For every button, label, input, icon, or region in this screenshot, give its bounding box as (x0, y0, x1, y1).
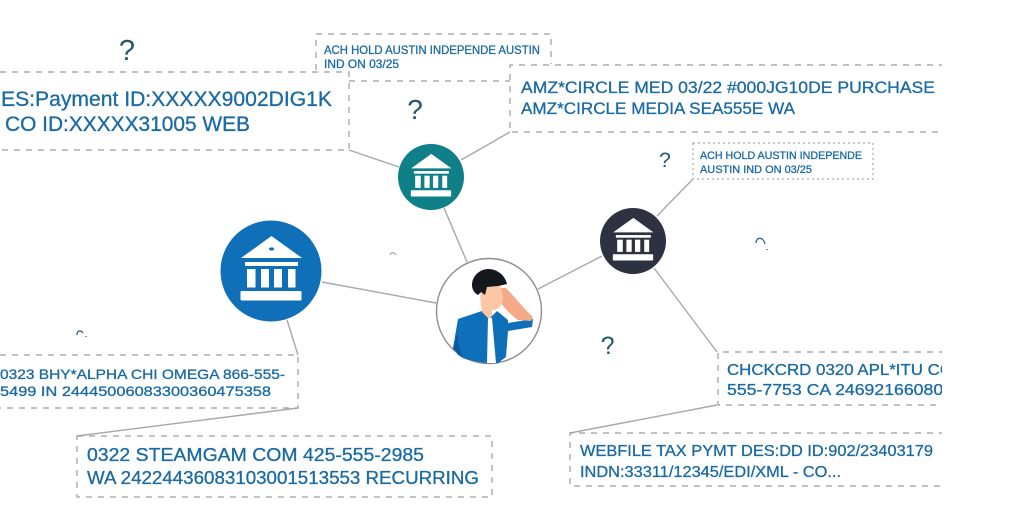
callout: payment ID (0, 72, 349, 150)
question mark: bottom centre: ? (600, 331, 616, 361)
icon: confused person (436, 258, 542, 364)
callout: BHY Alpha Chi Omega (0, 355, 298, 408)
callout: payment ID: ES:Payment ID:XXXXX9002DIG1K (1, 88, 332, 111)
callout: empty question box: ? (407, 94, 423, 125)
callout: ACH hold right (693, 143, 873, 179)
icon: blue bank (220, 220, 322, 322)
callout: AMZ circle media: AMZ*CIRCLE MED 03/22 #000JG10DE PURCHASE (521, 78, 935, 97)
callout: ACH hold top: ACH HOLD AUSTIN INDEPENDE AUSTIN (324, 43, 540, 57)
callout: payment ID: CO ID:XXXXX31005 WEB (5, 113, 250, 136)
icon: dark bank (600, 208, 666, 274)
callout: Webfile tax: WEBFILE TAX PYMT DES:DD ID:902/23403179 (580, 443, 933, 460)
question mark: small marker left (77, 331, 86, 337)
icon: partial question mark right (756, 238, 767, 250)
question mark: top left: ? (119, 35, 135, 67)
callout: Steam games (77, 436, 492, 497)
callout: Webfile tax (570, 433, 945, 486)
callout: ACH hold right: AUSTIN IND ON 03/25 (700, 164, 812, 176)
question mark: near dark bank: ? (659, 149, 671, 172)
callout: CHCKCRD (718, 352, 953, 405)
callout: Steam games: WA 24224436083103001513553 RECURRING (87, 468, 479, 488)
question mark: small marker centre (390, 253, 396, 255)
callout: ACH hold top (316, 34, 551, 71)
callout: BHY Alpha Chi Omega: 0323 BHY*ALPHA CHI OMEGA 866-555- (0, 366, 285, 382)
icon: teal bank (398, 144, 464, 210)
callout: CHCKCRD: CHCKCRD 0320 APL*ITU CO (727, 362, 953, 379)
callout: AMZ circle media (510, 65, 945, 132)
callout: Webfile tax: INDN:33311/12345/EDI/XML - CO... (580, 464, 841, 481)
callout: CHCKCRD: 555-7753 CA 246921660800 (727, 382, 953, 399)
callout: AMZ circle media: AMZ*CIRCLE MEDIA SEA555E WA (521, 99, 796, 118)
connector lines (77, 132, 717, 436)
callout: ACH hold right: ACH HOLD AUSTIN INDEPENDE (700, 150, 862, 162)
callout: ACH hold top: IND ON 03/25 (324, 57, 399, 71)
callout: BHY Alpha Chi Omega: 5499 IN 24445006083300360475358 (0, 383, 271, 399)
callout: Steam games: 0322 STEAMGAM COM 425-555-2985 (87, 445, 424, 465)
